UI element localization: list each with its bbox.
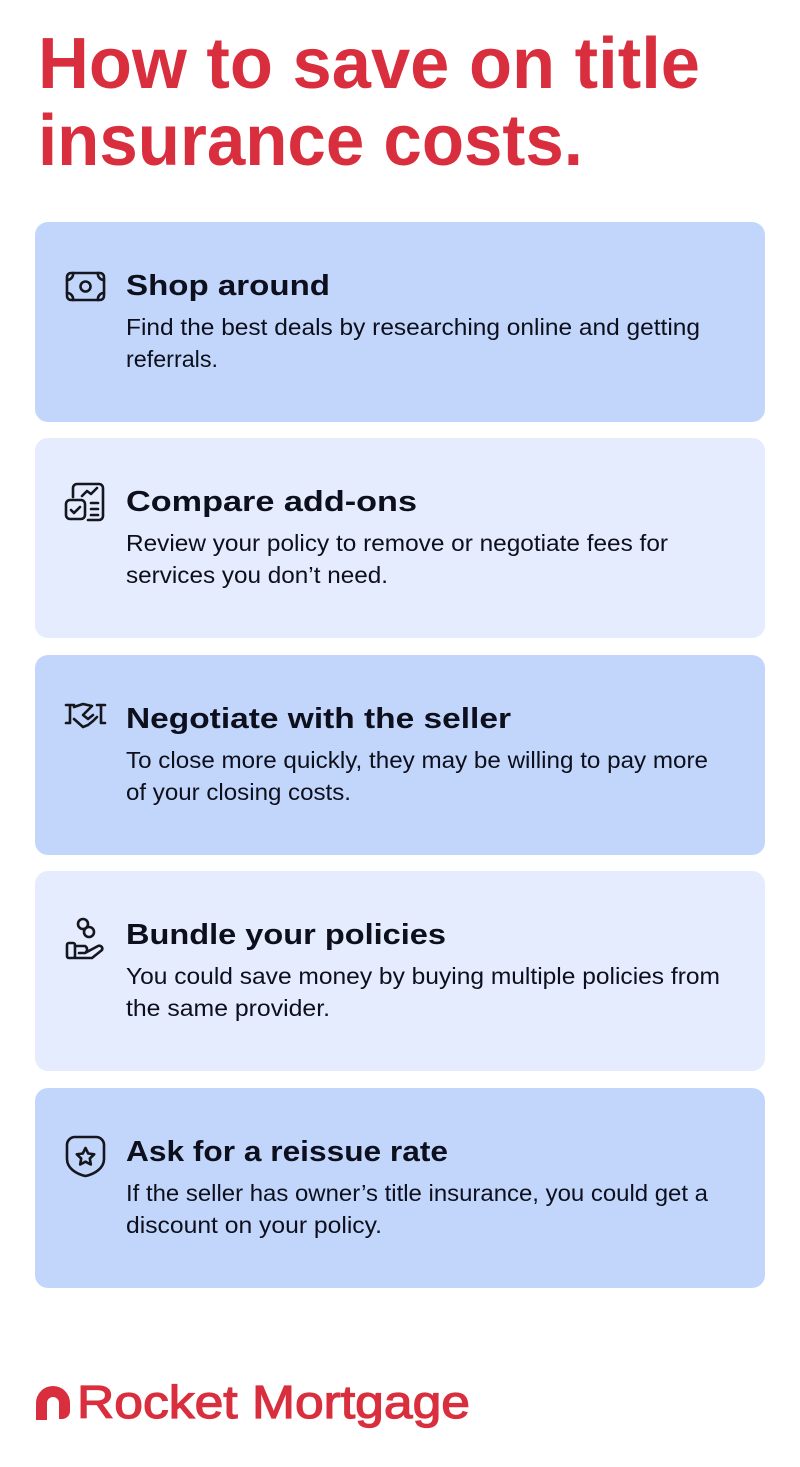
- panel: shop around: Find the best deals by researching online and getting: [126, 314, 700, 340]
- logo: Rocket Mortgage: Rocket Mortgage: [77, 1376, 470, 1428]
- panel: compare add-ons: services you don’t need.: [126, 562, 388, 588]
- panel: reissue rate: [35, 1088, 765, 1288]
- panel: compare add-ons: Compare add-ons: [126, 486, 417, 518]
- icon: hand with coins: [67, 919, 102, 958]
- title: [38, 24, 700, 181]
- icon: handshake: [66, 704, 105, 727]
- panel: negotiate with the seller: Negotiate with the seller: [126, 703, 511, 735]
- panel: negotiate with the seller: [35, 655, 765, 855]
- panel: reissue rate: If the seller has owner’s title insurance, you could get a: [126, 1180, 708, 1206]
- panel: negotiate with the seller: To close more quickly, they may be willing to pay more: [126, 747, 708, 773]
- panel: bundle your policies: You could save money by buying multiple policies from: [126, 963, 720, 989]
- panel: shop around: Shop around: [126, 270, 330, 302]
- panel: reissue rate: Ask for a reissue rate: [126, 1136, 448, 1168]
- panel: compare add-ons: [35, 438, 765, 638]
- panel: bundle your policies: Bundle your policies: [126, 919, 446, 951]
- panel: shop around: referrals.: [126, 346, 218, 372]
- icon: money bill: [67, 273, 104, 300]
- panel: negotiate with the seller: of your closing costs.: [126, 779, 351, 805]
- title: insurance costs.: [38, 101, 583, 181]
- panel: shop around: [35, 222, 765, 422]
- panel: bundle your policies: [35, 871, 765, 1071]
- icon: checklist document: [66, 484, 103, 520]
- icon: shield with star: [67, 1137, 104, 1176]
- panel: bundle your policies: the same provider.: [126, 995, 330, 1021]
- panel: reissue rate: discount on your policy.: [126, 1212, 382, 1238]
- panel: compare add-ons: Review your policy to remove or negotiate fees for: [126, 530, 668, 556]
- title: How to save on title: [38, 24, 700, 104]
